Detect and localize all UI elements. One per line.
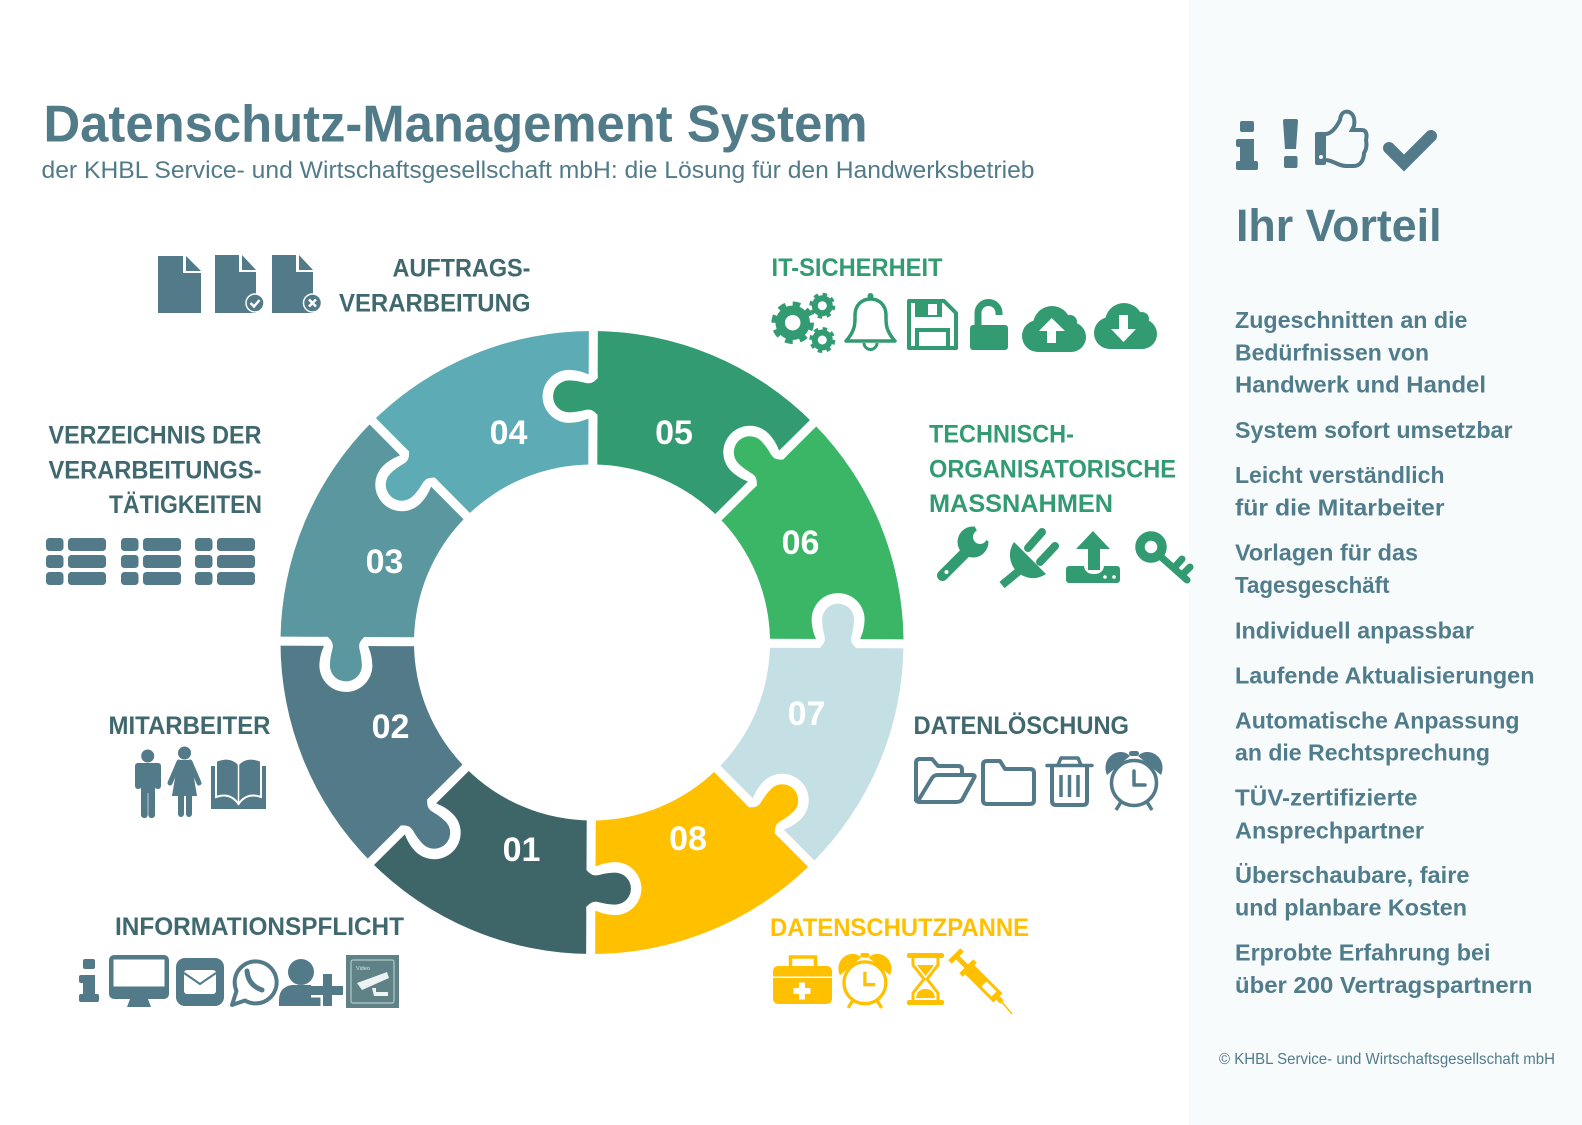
heading: Ihr Vorteil: Ihr Vorteil xyxy=(1236,200,1442,251)
icons: tables xyxy=(46,538,255,585)
heading: Verzeichnis der Verarbeitungstätigkeiten: VERARBEITUNGS- xyxy=(48,456,262,484)
segment 08 xyxy=(524,732,811,1019)
heading: Verzeichnis der Verarbeitungstätigkeiten xyxy=(48,422,262,519)
number 02: 02 xyxy=(372,708,409,746)
segment 03 xyxy=(281,421,467,642)
segment 05 xyxy=(593,331,814,518)
number 05: 05 xyxy=(655,414,693,452)
icons: data deletion xyxy=(916,751,1163,810)
benefits list: an die Rechtsprechung xyxy=(1235,740,1490,766)
segment 07 xyxy=(717,643,903,864)
heading: Informationspflicht: INFORMATIONSPFLICHT xyxy=(115,913,404,941)
benefits list xyxy=(1235,307,1534,998)
segment 02 xyxy=(216,575,503,862)
benefits list: Leicht verständlich xyxy=(1235,462,1444,488)
heading: Auftragsverarbeitung: VERARBEITUNG xyxy=(339,290,530,318)
heading: Technisch-organisatorische Massnahmen: ORGANISATORISCHE xyxy=(929,456,1176,484)
puzzle tab 05 into 04 xyxy=(542,370,600,423)
number 08: 08 xyxy=(669,820,707,858)
benefits list: Zugeschnitten an die xyxy=(1235,307,1468,333)
benefits list: über 200 Vertragspartnern xyxy=(1235,972,1532,998)
benefits list: Automatische Anpassung xyxy=(1235,708,1520,734)
benefits list: TÜV-zertifizierte xyxy=(1235,784,1418,810)
number 04: 04 xyxy=(490,414,527,452)
puzzle tab 04 into 03 xyxy=(364,444,442,522)
segment 06 xyxy=(681,423,968,710)
heading: Auftragsverarbeitung: AUFTRAGS- xyxy=(392,254,530,282)
benefits list: Erprobte Erfahrung bei xyxy=(1235,940,1490,966)
heading: IT-Sicherheit: IT-SICHERHEIT xyxy=(772,254,942,282)
subtitle: der KHBL Service- und Wirtschaftsgesellschaft mbH: die Lösung für den Handwerksbetrieb xyxy=(42,157,1034,184)
heading: Technisch-organisatorische Massnahmen: MASSNAHMEN xyxy=(929,490,1113,518)
number 06: 06 xyxy=(782,524,819,562)
puzzle tab 03 into 02 xyxy=(319,634,373,692)
segment 04 xyxy=(373,266,660,553)
benefits list: Überschaubare, faire xyxy=(1235,862,1470,888)
icons: information channels xyxy=(79,955,399,1008)
title: Datenschutz-Management System xyxy=(44,96,868,154)
number 01: 01 xyxy=(503,831,540,869)
icons: documents xyxy=(158,255,322,313)
icons: info, exclamation, thumb, check xyxy=(1236,112,1431,170)
heading: Verzeichnis der Verarbeitungstätigkeiten: VERZEICHNIS DER xyxy=(48,422,262,450)
puzzle tab 07 into 06 xyxy=(811,593,865,651)
segment 01 xyxy=(370,767,591,954)
heading: Technisch-organisatorische Massnahmen xyxy=(929,420,1176,518)
panel: Ihr Vorteil background xyxy=(1189,0,1582,1125)
icons: man, woman, book xyxy=(135,746,266,818)
benefits list: Ansprechpartner xyxy=(1235,818,1424,844)
puzzle wheel xyxy=(214,265,970,1020)
heading: Technisch-organisatorische Massnahmen: TECHNISCH- xyxy=(929,420,1074,448)
benefits list: Vorlagen für das xyxy=(1235,540,1418,566)
icons: technical measures xyxy=(942,518,1190,585)
puzzle tab 08 into 07 xyxy=(742,763,820,841)
heading: Datenlöschung: DATENLÖSCHUNG xyxy=(914,711,1129,740)
benefits list: Bedürfnissen von xyxy=(1235,340,1429,366)
number 07: 07 xyxy=(788,695,825,733)
icons: information channels: Video xyxy=(356,966,370,972)
benefits list: und planbare Kosten xyxy=(1235,894,1467,920)
puzzle tab 06 into 05 xyxy=(712,415,790,493)
heading: Datenschutzpanne: DATENSCHUTZPANNE xyxy=(770,914,1029,942)
benefits list: Tagesgeschäft xyxy=(1235,572,1390,598)
heading: Verzeichnis der Verarbeitungstätigkeiten: TÄTIGKEITEN xyxy=(109,491,262,519)
benefits list: Individuell anpassbar xyxy=(1235,618,1474,644)
icons: IT security xyxy=(774,293,1157,352)
number 03: 03 xyxy=(366,543,403,581)
heading: Mitarbeiter: MITARBEITER xyxy=(108,712,270,740)
benefits list: Laufende Aktualisierungen xyxy=(1235,662,1534,688)
puzzle tab 01 into 08 xyxy=(584,862,642,915)
puzzle tab 02 into 01 xyxy=(394,792,472,870)
copyright: © KHBL Service- und Wirtschaftsgesellschaft mbH xyxy=(1219,1051,1555,1068)
benefits list: für die Mitarbeiter xyxy=(1235,494,1445,520)
icons: data breach xyxy=(773,950,1012,1014)
benefits list: System sofort umsetzbar xyxy=(1235,417,1513,443)
heading: Auftragsverarbeitung xyxy=(339,254,530,318)
benefits list: Handwerk und Handel xyxy=(1235,372,1486,398)
